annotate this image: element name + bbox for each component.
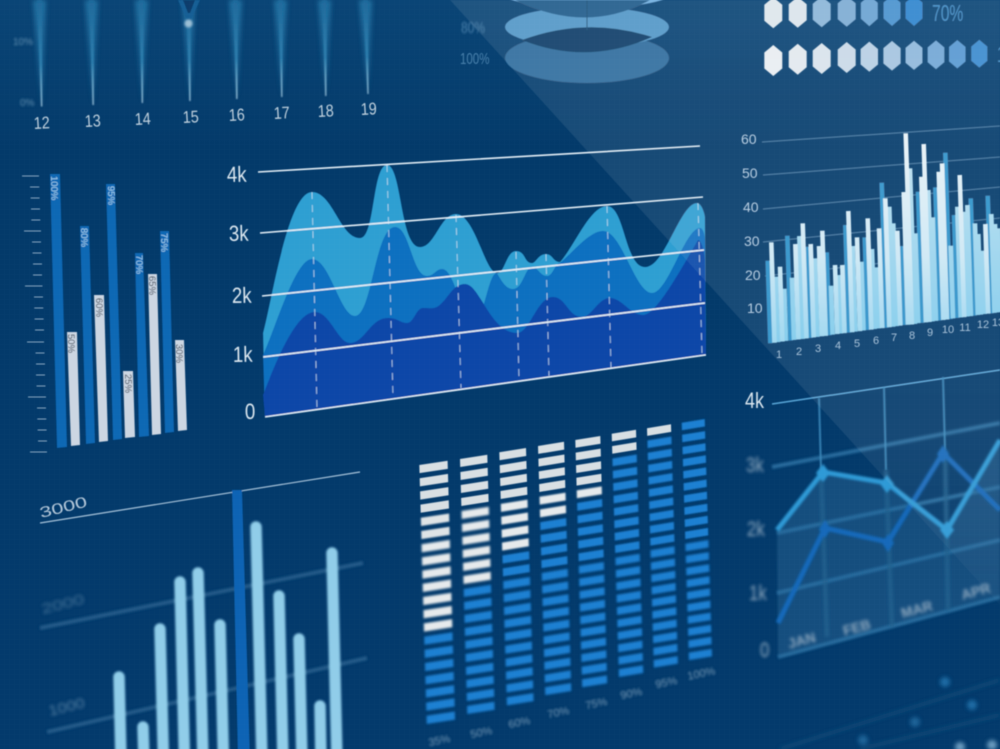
vertical guides lower [821,450,948,637]
x axis labels [776,317,1000,361]
bars: mid blue [768,153,992,343]
column 60 percent [499,448,534,705]
centre axis [586,0,588,30]
top gridline [772,370,1000,404]
highlighted blue bar [232,490,250,749]
label 4k: 4k [745,389,765,413]
blurred column labels: 95% [654,675,679,691]
bar value labels: 95% [105,186,116,206]
x axis labels: 2 [796,346,802,358]
blurred column labels: 100% [686,665,717,683]
day labels 12-19 [33,100,377,133]
vertical guides upper [819,377,945,470]
blurred column labels: 35% [427,733,452,749]
dark lens [522,27,652,52]
hexagon row 70 percent [764,0,922,28]
blurred label 1000: 1000 [47,695,87,720]
blurred column labels: 60% [507,715,532,731]
panel: central area chart [227,146,706,424]
day labels 12-19: 19 [360,100,377,119]
axis labels [227,163,255,424]
light series [777,440,1000,539]
day labels 12-19: 14 [134,110,151,129]
x axis labels: 4 [835,340,841,352]
dashed markers [312,165,702,409]
column 95 percent [647,424,678,668]
blurred month labels: APR [959,580,992,603]
blurred column labels: 90% [619,686,644,702]
spike glow [33,0,372,106]
bars: pale [771,133,988,343]
blurred month labels: FEB [841,616,872,639]
marker drop on day 15 [178,0,200,28]
axis labels: 4k [227,163,248,187]
light bars [119,527,337,749]
column 35 percent [419,461,455,724]
dark area layer [263,240,706,417]
blurred gridlines [40,563,367,732]
column 90 percent [612,430,643,677]
blurred column labels: 75% [584,696,609,712]
hexagon row 100 percent [764,40,987,76]
blurred y labels [746,454,769,663]
day labels 12-19: 16 [228,106,245,125]
day labels 12-19: 18 [317,102,334,121]
x axis labels: 1 [776,349,782,361]
day labels 12-19: 17 [273,104,290,123]
percent labels: 80% [461,18,485,36]
light area layer [263,165,706,417]
blurred percent labels: 0% [20,98,35,109]
blurred column labels: 70% [546,705,571,721]
blurred gridlines [772,423,1000,657]
blurred month labels: MAR [899,597,934,621]
blurred y labels: 1k [749,582,767,606]
x axis labels: 3 [815,343,821,355]
bar value labels: 75% [158,233,169,253]
scatter dots [858,677,997,749]
column 100 percent [682,419,712,660]
bar value labels: 25% [122,374,133,394]
middle disc [505,7,669,47]
blurred month labels [786,580,992,652]
tick scale [22,176,47,452]
panel: top right hexagon rows [764,0,1000,76]
percent labels [460,18,489,67]
bar value labels: 50% [65,334,76,354]
day labels 12-19: 15 [182,108,199,127]
axis labels: 2k [232,284,253,308]
x axis labels: 9 [927,327,933,339]
blurred percent labels [13,37,35,109]
upper lens [515,0,650,18]
mid area layer [263,227,706,417]
panel: bottom left vertical bars [38,472,367,749]
axis labels: 1k [233,343,254,367]
panel: bottom right blurred scatter [780,677,1000,749]
x axis labels: 12 [977,319,989,331]
x axis labels: 11 [959,322,971,334]
bar value labels: 60% [93,298,104,318]
y axis labels: 10 [747,300,763,316]
blurred y labels: 3k [746,454,764,478]
x axis labels: 8 [909,330,915,342]
x axis labels: 7 [891,332,897,344]
panel: top centre stacked ellipses [460,0,670,83]
bottom disc [505,33,669,83]
percent labels: 100% [460,49,489,67]
column 70 percent [538,442,571,695]
day labels 12-19: 13 [84,112,101,131]
panel: right line chart [745,370,1000,663]
bars: light blue [776,168,1000,342]
gridlines [258,146,706,417]
y axis labels: 60 [741,131,757,147]
area under light series [777,440,1000,657]
blue bars [50,174,174,448]
panel: bottom centre segmented bars [419,419,717,749]
gridlines [762,126,1000,310]
label 70 percent: 70% [932,1,963,27]
y axis labels: 20 [745,267,761,283]
blurred month labels: JAN [786,629,817,652]
x axis labels: 6 [873,335,879,347]
y axis labels: 40 [743,199,759,215]
blurred percent labels: 10% [13,37,33,48]
label 3000: 3000 [38,493,89,521]
blurred column labels: 50% [469,725,494,741]
top disc [504,0,670,8]
blurred y labels: 2k [747,518,765,542]
panel: top left fading spike chart [13,0,377,133]
blue series [778,445,1000,623]
y axis labels [741,131,763,316]
day labels 12-19: 12 [33,114,50,133]
diagonal translucent overlay [450,0,1000,605]
bar value labels: 70% [133,255,144,275]
bar value labels: 80% [78,228,89,248]
y axis labels: 50 [742,165,758,181]
axis labels: 0 [245,401,255,424]
white bars [67,274,187,446]
bar value labels: 65% [146,276,157,296]
y axis labels: 30 [744,233,760,249]
bar value labels: 100% [48,176,59,201]
axis labels: 3k [229,222,250,246]
blurred column labels [427,665,717,749]
x axis labels: 10 [942,324,954,336]
blurred label 2000: 2000 [40,590,86,617]
panel: left bar chart [22,174,187,452]
bar value labels: 30% [173,344,184,364]
spikes [37,0,369,106]
bar value labels [48,176,184,394]
sharp 3000 gridline [40,472,360,523]
x axis labels: 5 [854,338,860,350]
faint scatter lines [780,680,1000,749]
panel: right grouped bar chart [741,126,1000,361]
column 75 percent [575,436,607,687]
column 50 percent [460,455,495,714]
blurred y labels: 0 [760,639,769,663]
